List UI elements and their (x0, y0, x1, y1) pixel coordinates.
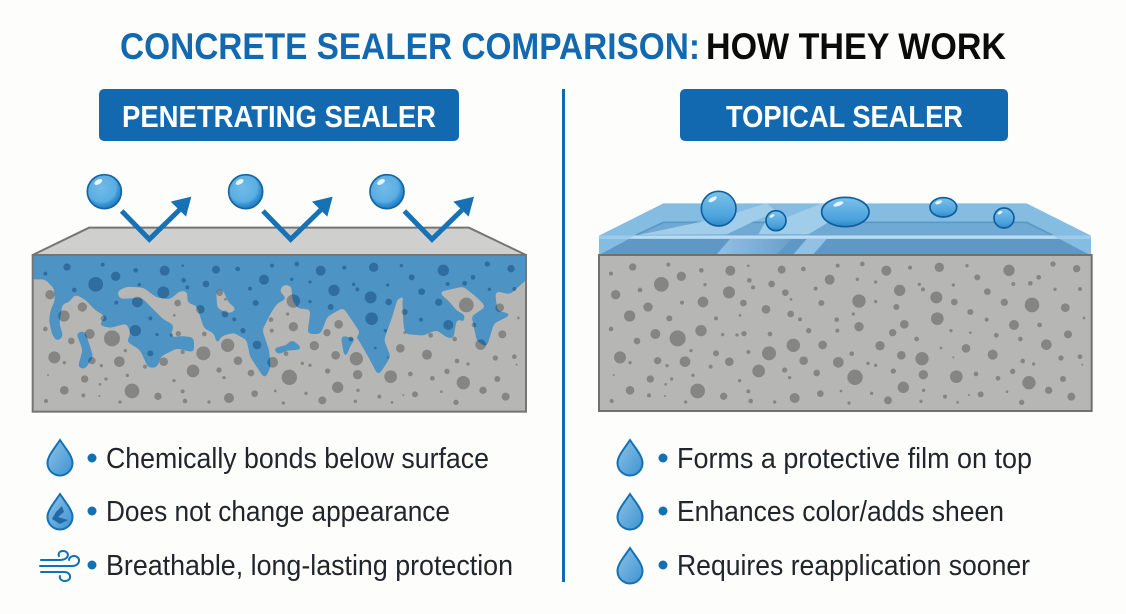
heading: penetrating sealer (99, 89, 459, 141)
slab outline (33, 255, 526, 412)
center divider (562, 89, 565, 582)
diagram: penetrating sealer concrete slab (33, 175, 526, 412)
heading: topical sealer (680, 89, 1008, 141)
item: reapplication: Requires reapplication sooner (677, 550, 1030, 582)
item: enhances color: Enhances color/adds sheen (677, 496, 1004, 528)
beaded water droplets (701, 191, 1014, 231)
item: breathable: Breathable, long-lasting protection (106, 550, 513, 582)
water droplets and deflection arrows (87, 175, 474, 239)
list: penetrating sealer benefits (40, 440, 513, 582)
sealer penetration area (34, 256, 525, 376)
sealer film (599, 203, 1091, 255)
item: protective film: Forms a protective film on top (677, 443, 1032, 475)
heading: topical sealer: TOPICAL SEALER (726, 99, 963, 134)
list: topical sealer traits (618, 440, 1032, 584)
slab front face with pores (599, 255, 1092, 411)
title: CONCRETE SEALER COMPARISON: (120, 26, 700, 67)
heading: penetrating sealer: PENETRATING SEALER (122, 99, 436, 134)
item: chemically bonds: Chemically bonds below surface (106, 443, 489, 475)
title: HOW THEY WORK (706, 26, 1006, 67)
slab top face (33, 228, 526, 255)
slab front face with pores (33, 255, 526, 412)
item: appearance: Does not change appearance (106, 496, 450, 528)
diagram: topical sealer concrete slab (599, 191, 1092, 411)
